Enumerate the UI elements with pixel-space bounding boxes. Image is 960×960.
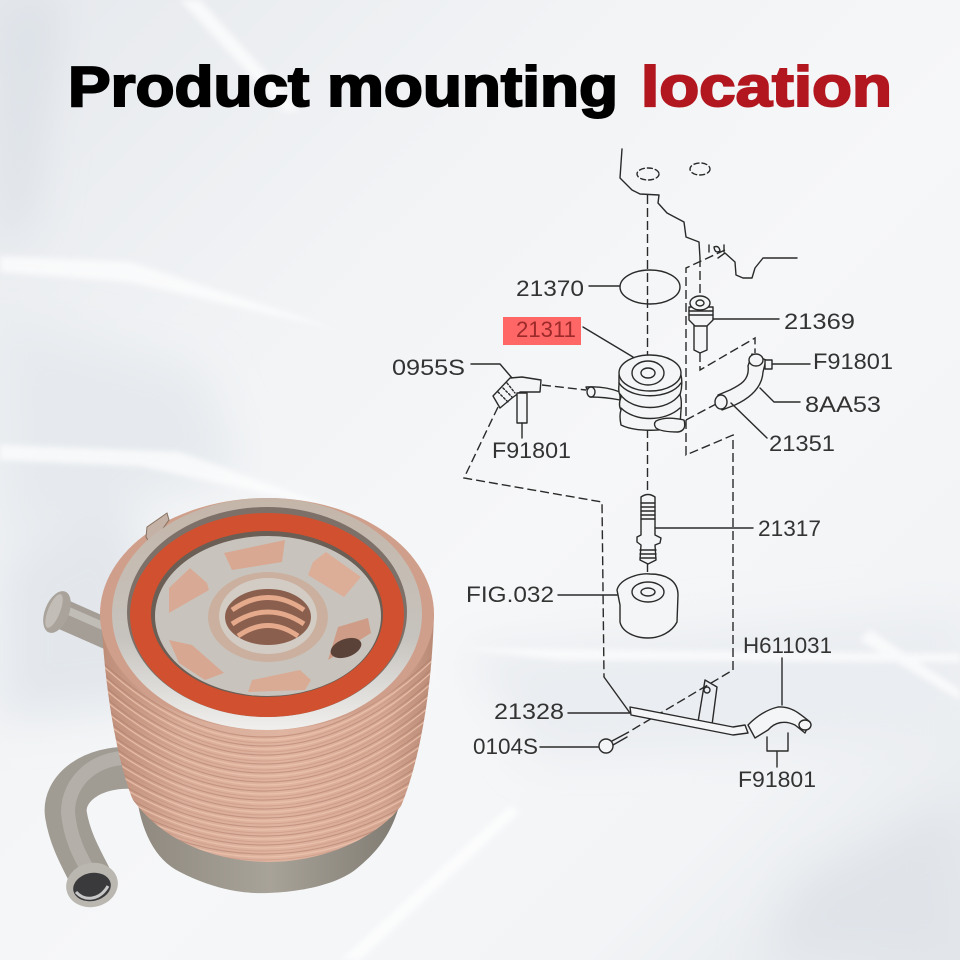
copper finned body [100, 613, 434, 862]
filter FIG.032: FIG.032 [466, 582, 554, 607]
O-ring 21370: 21370 [516, 276, 584, 301]
highlighted label 21311: 21311 [516, 317, 576, 342]
title [68, 55, 892, 119]
pipe 21328 with hose and bolt [473, 633, 832, 792]
parts diagram [392, 149, 893, 792]
O-ring 21370 [516, 270, 680, 304]
cooler drawing [586, 355, 685, 432]
filter FIG.032 [466, 574, 678, 638]
pipe 21328 with hose and bolt: H611031 [743, 633, 832, 658]
pipe 21328 with hose and bolt: 21328 [494, 699, 564, 724]
left fitting with labels: F91801 [492, 438, 571, 463]
orange seal ring [130, 513, 404, 717]
pipe 21328 with hose and bolt: F91801 [738, 767, 816, 792]
steel plate with windows [155, 536, 381, 696]
left fitting with labels: 0955S [392, 355, 465, 380]
centre boss and threaded hole [208, 572, 328, 662]
right hose with labels: 21351 [769, 431, 835, 456]
locating tab [146, 513, 169, 545]
dashed assembly lines [464, 195, 755, 733]
highlighted label 21311 [503, 317, 633, 357]
copper top rim [100, 498, 434, 730]
title: location [641, 55, 892, 119]
bolt 21369: 21369 [784, 309, 855, 334]
stud 21317: 21317 [758, 516, 821, 541]
steel rim [112, 498, 422, 730]
engine block outline [620, 149, 797, 278]
left fitting with labels [392, 355, 571, 463]
title: Product mounting [68, 55, 618, 119]
bent outlet pipe [62, 758, 135, 912]
stud 21317 [637, 494, 821, 564]
product photo: oil cooler [38, 498, 434, 912]
pipe 21328 with hose and bolt: 0104S [473, 734, 538, 759]
right hose with labels: F91801 [813, 349, 893, 374]
upper stub pipe [38, 587, 112, 637]
bolt 21369 [689, 296, 855, 353]
steel bottom cup [136, 790, 403, 893]
right hose with labels: 8AA53 [805, 392, 881, 417]
right hose with labels [715, 349, 893, 456]
